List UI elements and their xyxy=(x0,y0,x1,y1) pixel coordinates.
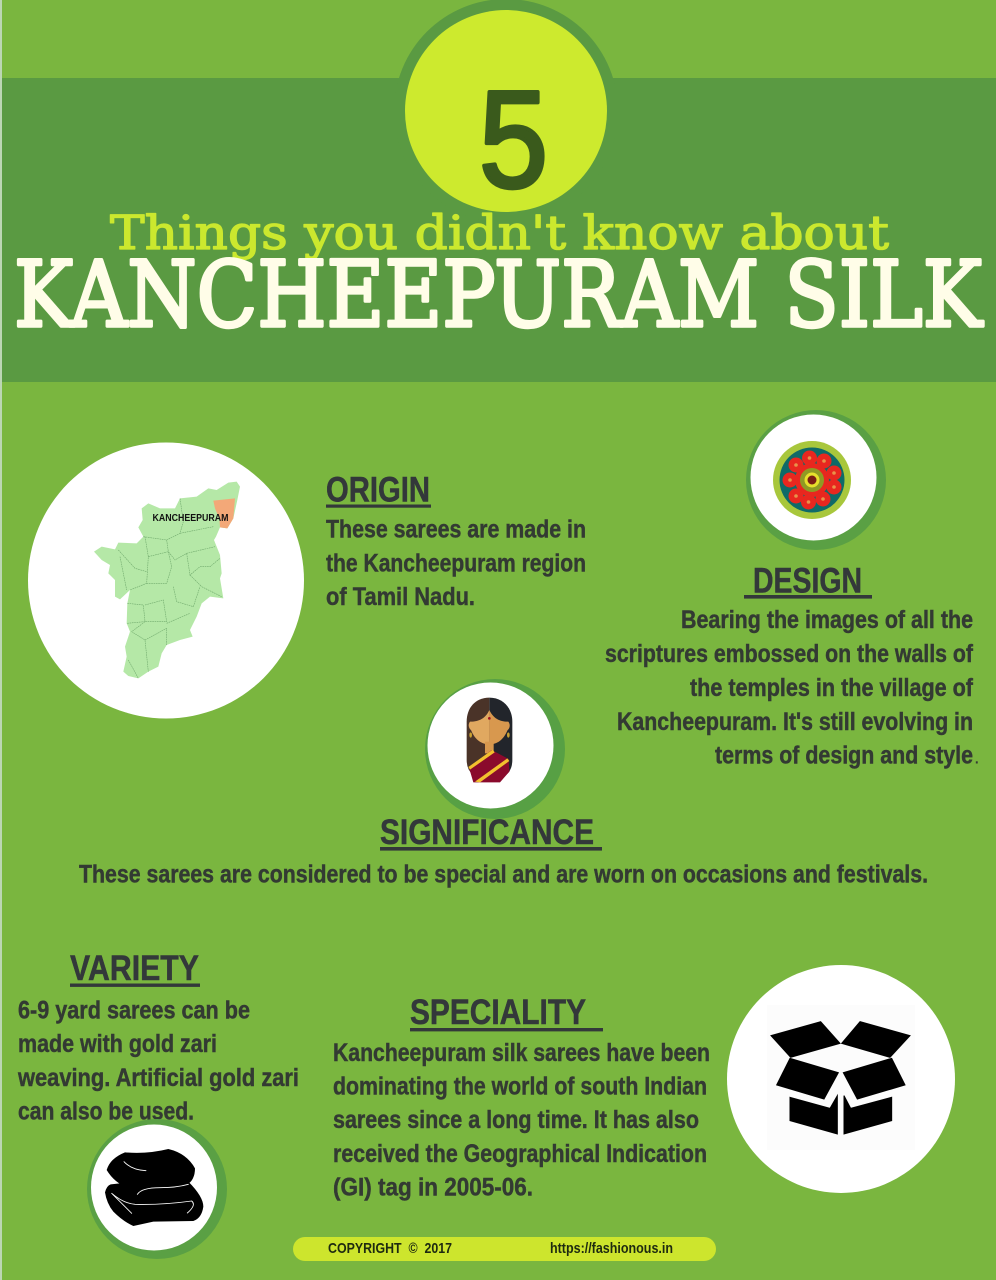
woman figure xyxy=(467,698,512,782)
folded fabric xyxy=(105,1149,203,1226)
fabric icon xyxy=(87,1119,227,1259)
subtitle: Things you didn't know about xyxy=(110,206,889,261)
variety text: can also be used. xyxy=(18,1098,194,1126)
speciality text: received the Geographical Indication xyxy=(333,1140,707,1168)
open box xyxy=(771,1022,910,1134)
map of Tamil Nadu xyxy=(94,482,240,678)
footer bar xyxy=(293,1237,716,1261)
number badge xyxy=(405,10,607,217)
variety heading: VARIETY xyxy=(70,949,199,988)
woman icon xyxy=(425,679,565,819)
number badge: 5 xyxy=(479,63,548,217)
panel: significance xyxy=(79,679,928,888)
variety text: weaving. Artificial gold zari xyxy=(17,1064,299,1092)
panel: variety xyxy=(17,949,299,1259)
origin text: the Kancheepuram region xyxy=(326,550,586,578)
panel: design xyxy=(605,410,980,770)
copyright: COPYRIGHT © 2017 xyxy=(328,1240,452,1257)
variety text xyxy=(17,996,299,1126)
panel: speciality xyxy=(333,965,955,1202)
design text xyxy=(605,606,980,770)
speciality heading: SPECIALITY xyxy=(410,993,586,1032)
variety text: 6-9 yard sarees can be xyxy=(18,996,250,1024)
design icon xyxy=(746,410,886,550)
origin heading: ORIGIN xyxy=(326,470,430,510)
significance heading: SIGNIFICANCE xyxy=(380,813,594,852)
origin text xyxy=(326,516,586,611)
header banner xyxy=(2,0,996,382)
speciality text: Kancheepuram silk sarees have been xyxy=(333,1039,710,1067)
design heading: DESIGN xyxy=(753,562,862,600)
design text: . xyxy=(974,746,980,768)
number badge ring xyxy=(394,0,618,223)
panel: origin xyxy=(28,442,586,718)
origin text: These sarees are made in xyxy=(326,516,586,544)
speciality text xyxy=(333,1039,710,1202)
speciality text: dominating the world of south Indian xyxy=(333,1072,707,1100)
website: https://fashionous.in xyxy=(550,1240,673,1257)
speciality text: sarees since a long time. It has also xyxy=(333,1106,699,1134)
banner band xyxy=(2,78,996,382)
origin text: of Tamil Nadu. xyxy=(326,583,475,611)
variety text: made with gold zari xyxy=(18,1030,217,1058)
speciality text: (GI) tag in 2005-06. xyxy=(333,1174,533,1202)
mandala motif xyxy=(773,441,851,519)
map label: KANCHEEPURAM xyxy=(152,512,229,524)
box icon xyxy=(727,965,955,1193)
map circle xyxy=(28,442,304,718)
